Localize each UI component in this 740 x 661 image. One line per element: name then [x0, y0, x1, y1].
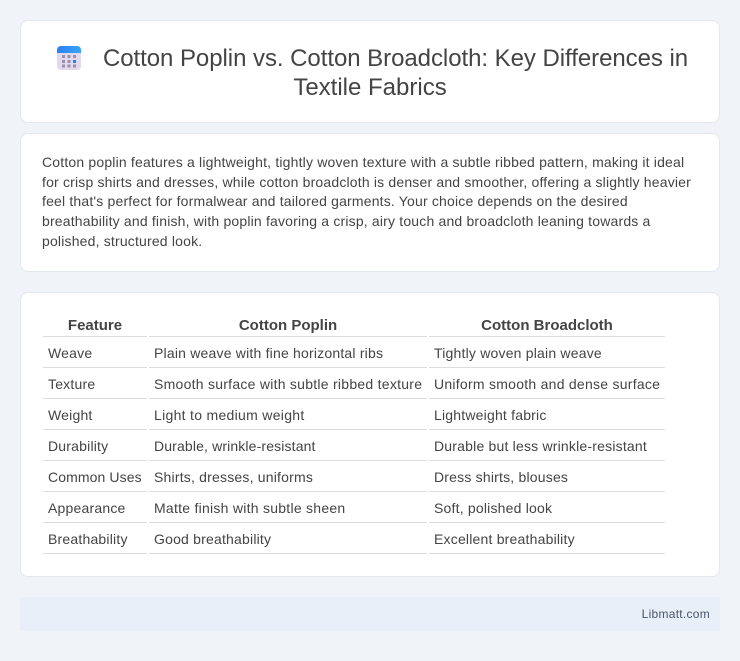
row: texture: Texture	[48, 376, 95, 392]
row: appearance: Matte finish with subtle sheen	[154, 500, 345, 516]
row: appearance: Appearance	[48, 500, 126, 516]
text block: introduction: Cotton poplin features a lightweight, tightly woven texture with a subtle ribbed pattern, making it ideal	[42, 154, 684, 170]
row: appearance	[48, 500, 552, 516]
row: texture: Uniform smooth and dense surface	[434, 376, 660, 392]
footer bar	[20, 597, 720, 631]
panel: comparison table	[20, 292, 720, 577]
text block: introduction	[42, 154, 691, 249]
table header: feature: Feature	[68, 317, 122, 334]
row: weight: Weight	[48, 407, 93, 423]
row: durability: Durability	[48, 438, 108, 454]
row: common uses	[48, 469, 568, 485]
row: breathability: Good breathability	[154, 531, 271, 547]
row: durability	[48, 438, 647, 454]
row: weight	[48, 407, 547, 423]
row: appearance: Soft, polished look	[434, 500, 552, 516]
row: weave: Weave	[48, 345, 92, 361]
title	[103, 45, 688, 101]
row: common uses: Dress shirts, blouses	[434, 469, 568, 485]
row: breathability	[48, 531, 575, 547]
footer text: Libmatt.com	[642, 607, 710, 621]
title: Textile Fabrics	[293, 74, 447, 101]
row: common uses: Shirts, dresses, uniforms	[154, 469, 313, 485]
row: breathability: Excellent breathability	[434, 531, 575, 547]
row: breathability: Breathability	[48, 531, 128, 547]
row: durability: Durable but less wrinkle-resistant	[434, 438, 647, 454]
row: common uses: Common Uses	[48, 469, 142, 485]
row: weave: Plain weave with fine horizontal ribs	[154, 345, 383, 361]
text block: introduction: breathability and finish, with poplin favoring a crisp, airy touch and broadcloth leaning towards a	[42, 213, 650, 229]
title: Cotton Poplin vs. Cotton Broadcloth: Key Differences in	[103, 45, 688, 72]
row: weave: Tightly woven plain weave	[434, 345, 602, 361]
row: texture	[48, 376, 660, 392]
row: weave	[48, 345, 602, 361]
text block: introduction: feel that's perfect for formalwear and tailored garments. Your choice depends on the desired	[42, 193, 628, 209]
row: durability: Durable, wrinkle-resistant	[154, 438, 316, 454]
table header: cotton broadcloth: Cotton Broadcloth	[481, 317, 613, 334]
row: texture: Smooth surface with subtle ribbed texture	[154, 376, 422, 392]
panel: introduction	[20, 133, 720, 272]
table header: cotton poplin: Cotton Poplin	[239, 317, 337, 334]
text block: introduction: for crisp shirts and dresses, while cotton broadcloth is denser and smoother, offering a slightly heavier	[42, 174, 691, 190]
text block: introduction: polished, structured look.	[42, 233, 202, 249]
panel: title card	[20, 20, 720, 123]
row: weight: Lightweight fabric	[434, 407, 547, 423]
icon: calendar	[57, 46, 81, 70]
row: weight: Light to medium weight	[154, 407, 305, 423]
